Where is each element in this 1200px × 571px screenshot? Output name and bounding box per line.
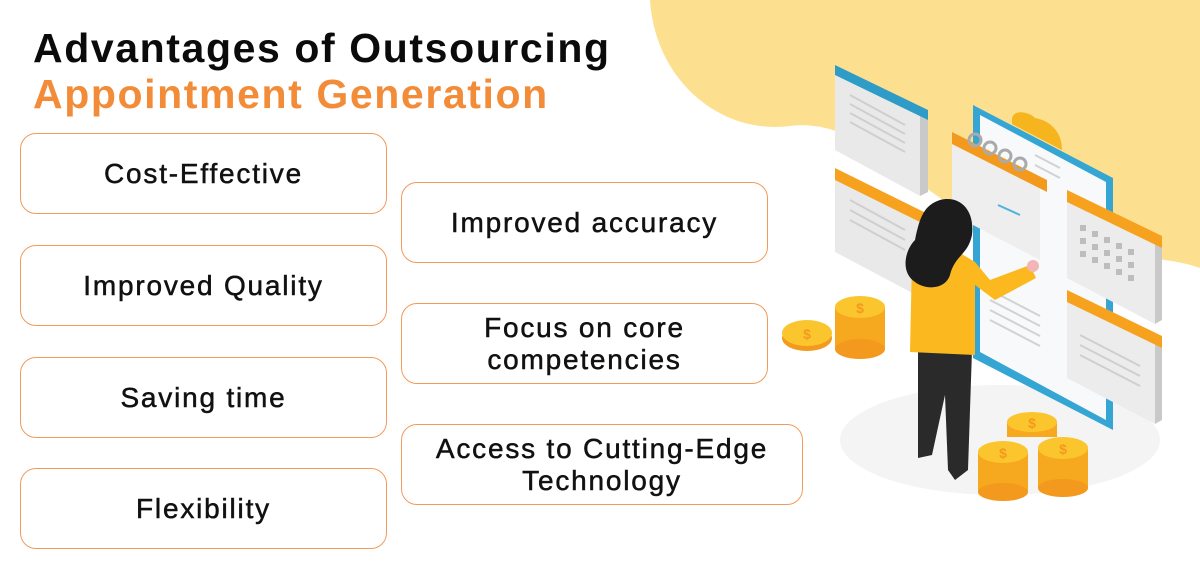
box: Cost-Effective xyxy=(20,133,387,214)
coins: $ xyxy=(1028,415,1036,431)
box: Improved accuracy: Improved accuracy xyxy=(451,206,718,238)
woman xyxy=(906,199,1039,480)
title: Appointment Generation xyxy=(33,71,549,117)
coins: $ xyxy=(803,326,811,342)
box: Cost-Effective: Cost-Effective xyxy=(104,158,303,188)
box: Improved Quality: Improved Quality xyxy=(83,270,324,300)
clipboard xyxy=(973,105,1113,430)
box: Access to Cutting-Edge Technology xyxy=(401,424,803,505)
box: Access to Cutting-Edge Technology: Technology xyxy=(522,464,682,496)
calendar right xyxy=(1067,190,1162,324)
panel blue top-left xyxy=(835,65,928,196)
box: Focus on core competencies xyxy=(401,303,768,384)
box: Access to Cutting-Edge Technology: Access to Cutting-Edge xyxy=(436,432,768,464)
coins: $ xyxy=(856,300,864,316)
box: Flexibility: Flexibility xyxy=(136,492,271,524)
shadow xyxy=(840,385,1160,495)
box: Saving time xyxy=(20,357,387,438)
box: Saving time: Saving time xyxy=(120,382,287,412)
panel orange left xyxy=(835,168,928,297)
box: Focus on core competencies: competencies xyxy=(487,344,682,374)
coins: $ xyxy=(1059,441,1067,457)
box: Focus on core competencies: Focus on core xyxy=(484,312,685,342)
box: Improved accuracy xyxy=(401,182,768,263)
coins: $ xyxy=(999,445,1007,461)
title xyxy=(33,25,611,117)
coins xyxy=(782,296,1088,501)
panel right lower xyxy=(1067,290,1162,424)
box: Flexibility xyxy=(20,468,387,549)
notepad xyxy=(952,132,1047,260)
title: Advantages of Outsourcing xyxy=(33,25,611,71)
box: Improved Quality xyxy=(20,245,387,326)
